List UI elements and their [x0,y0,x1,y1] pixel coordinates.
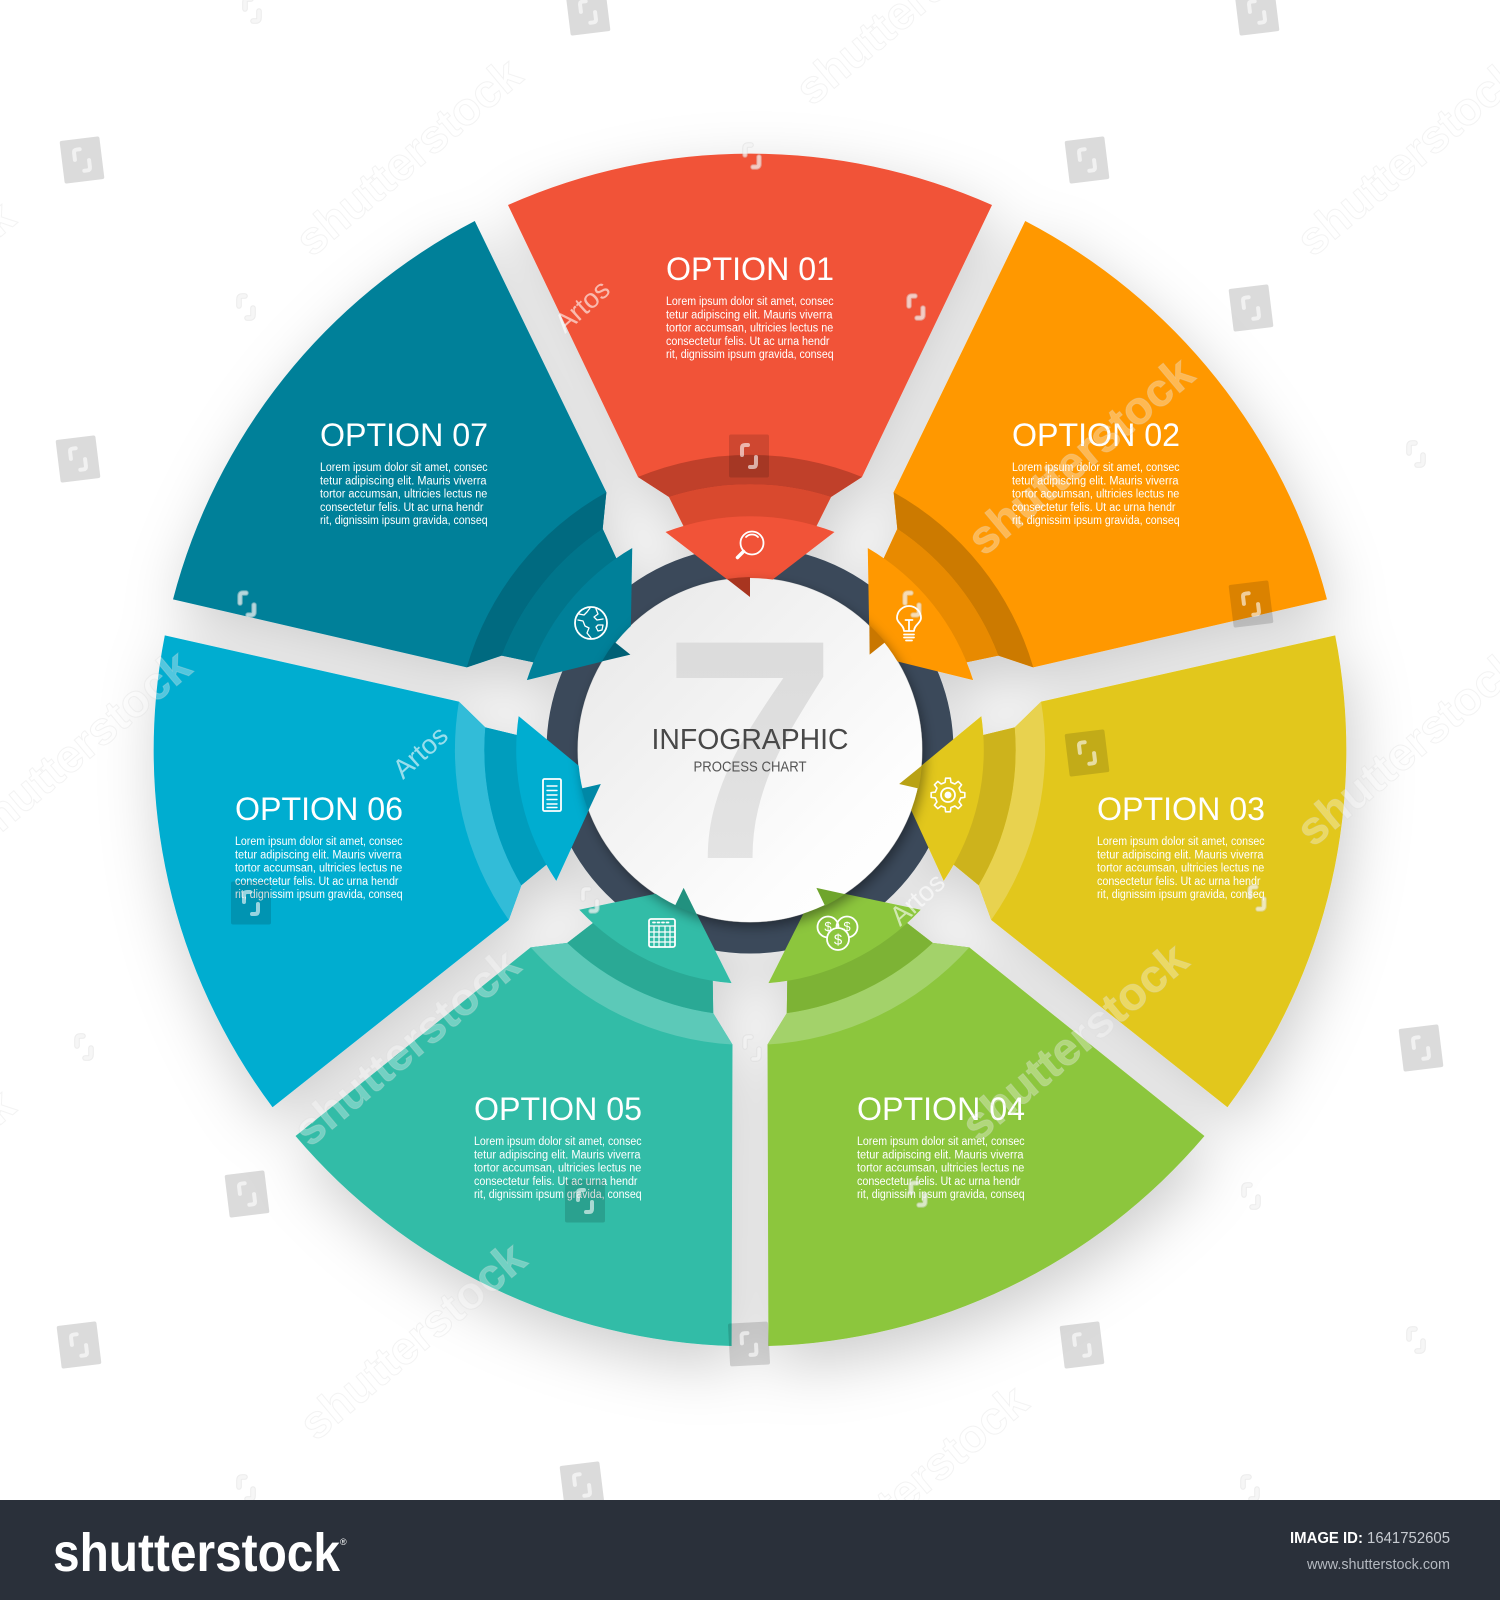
body copy: tortor accumsan, ultricies lectus ne [474,1162,641,1174]
watermarks: shutterstock [791,1374,1038,1593]
body copy [235,836,403,901]
segment: option 01 red [508,154,992,597]
body copy: tortor accumsan, ultricies lectus ne [857,1162,1024,1174]
body copy: Lorem ipsum dolor sit amet, consec [1012,462,1180,474]
watermarks: Artos [387,720,454,784]
segment: option 02 orange [719,189,1367,844]
body copy: Lorem ipsum dolor sit amet, consec [474,1136,642,1148]
body copy: rit, dignissim ipsum gravida, conseq [857,1189,1025,1201]
body copy: tortor accumsan, ultricies lectus ne [235,862,402,874]
heading: OPTION 02 [1012,417,1180,453]
segment: option 03 yellow [845,548,1385,1119]
heading: OPTION 01 [666,251,834,287]
watermarks: shutterstock [289,1231,536,1450]
icon: gear [931,778,965,812]
body copy: Lorem ipsum dolor sit amet, consec [235,836,403,848]
body copy: tetur adipiscing elit. Mauris viverra [1097,849,1264,861]
body copy: rit, dignissim ipsum gravida, conseq [1012,515,1180,527]
body copy [1012,462,1180,527]
footer bar [0,1500,1500,1600]
dark ring [562,562,938,938]
body copy: Lorem ipsum dolor sit amet, consec [857,1136,1025,1148]
heading: OPTION 06 [235,791,403,827]
body copy: rit, dignissim ipsum gravida, conseq [235,889,403,901]
registered mark: ® [340,1537,347,1547]
option 04 text [857,1091,1025,1201]
footer logo: shutterstock [53,1523,341,1583]
body copy: consectetur felis. Ut ac urna hendr [1012,502,1176,514]
center white circle [578,578,922,922]
body copy: Lorem ipsum dolor sit amet, consec [320,462,488,474]
watermarks: Artos [884,867,951,931]
body copy: tortor accumsan, ultricies lectus ne [320,488,487,500]
arrow tip folds over the circle [581,577,924,916]
body copy: tortor accumsan, ultricies lectus ne [1012,488,1179,500]
body copy: consectetur felis. Ut ac urna hendr [1097,876,1261,888]
icon: coins [818,916,858,950]
segment: option 04 green [598,783,1227,1392]
center title: INFOGRAPHIC [652,724,848,756]
icon: coins: $ [824,919,832,934]
body copy: consectetur felis. Ut ac urna hendr [474,1176,638,1188]
image id: IMAGE ID: 1641752605 [1290,1530,1450,1547]
body copy: tetur adipiscing elit. Mauris viverra [857,1149,1024,1161]
body copy: Lorem ipsum dolor sit amet, consec [666,296,834,308]
heading: OPTION 04 [857,1091,1025,1127]
center subtitle: PROCESS CHART [694,758,806,776]
body copy: tetur adipiscing elit. Mauris viverra [666,309,833,321]
body copy: tortor accumsan, ultricies lectus ne [666,322,833,334]
watermarks: Artos [549,274,616,338]
icon: magnifier [738,532,764,558]
segment: option 07 dark teal [133,189,781,844]
segment: option 06 cyan [115,548,655,1119]
body copy: rit, dignissim ipsum gravida, conseq [320,515,488,527]
body copy [857,1136,1025,1201]
body copy [1097,836,1265,901]
watermarks: shutterstock [283,937,530,1156]
big number 7: 7 [663,576,837,925]
body copy [320,462,488,527]
option 07 text [320,417,488,527]
body copy: consectetur felis. Ut ac urna hendr [320,502,484,514]
wheel with drop shadow [115,154,1385,1392]
body copy: tetur adipiscing elit. Mauris viverra [320,475,487,487]
body copy: rit, dignissim ipsum gravida, conseq [474,1189,642,1201]
option 02 text [1012,417,1180,527]
icon: lightbulb [897,606,921,640]
icon: calendar [649,919,675,947]
body copy: Lorem ipsum dolor sit amet, consec [1097,836,1265,848]
icon: document list [543,779,561,811]
heading: OPTION 05 [474,1091,642,1127]
watermarks: shutterstock [957,346,1204,565]
body copy: tetur adipiscing elit. Mauris viverra [235,849,402,861]
site url: www.shutterstock.com [1306,1556,1450,1573]
watermarks: shutterstock [285,47,532,266]
icon: coins: $ [843,919,851,934]
option 03 text [1097,791,1265,901]
body copy: tetur adipiscing elit. Mauris viverra [1012,475,1179,487]
body copy: consectetur felis. Ut ac urna hendr [235,876,399,888]
heading: OPTION 03 [1097,791,1265,827]
segment: option 05 teal [273,783,902,1392]
option 05 text [474,1091,642,1201]
body copy: consectetur felis. Ut ac urna hendr [857,1176,1021,1188]
option 01 text [666,251,834,361]
body copy: tetur adipiscing elit. Mauris viverra [474,1149,641,1161]
body copy: rit, dignissim ipsum gravida, conseq [666,349,834,361]
heading: OPTION 07 [320,417,488,453]
body copy [474,1136,642,1201]
icon: coins: $ [834,932,843,948]
body copy: rit, dignissim ipsum gravida, conseq [1097,889,1265,901]
body copy [666,296,834,361]
body copy: consectetur felis. Ut ac urna hendr [666,336,830,348]
body copy: tortor accumsan, ultricies lectus ne [1097,862,1264,874]
icon: globe [575,607,607,639]
watermarks: shutterstock [951,932,1198,1151]
option 06 text [235,791,403,901]
